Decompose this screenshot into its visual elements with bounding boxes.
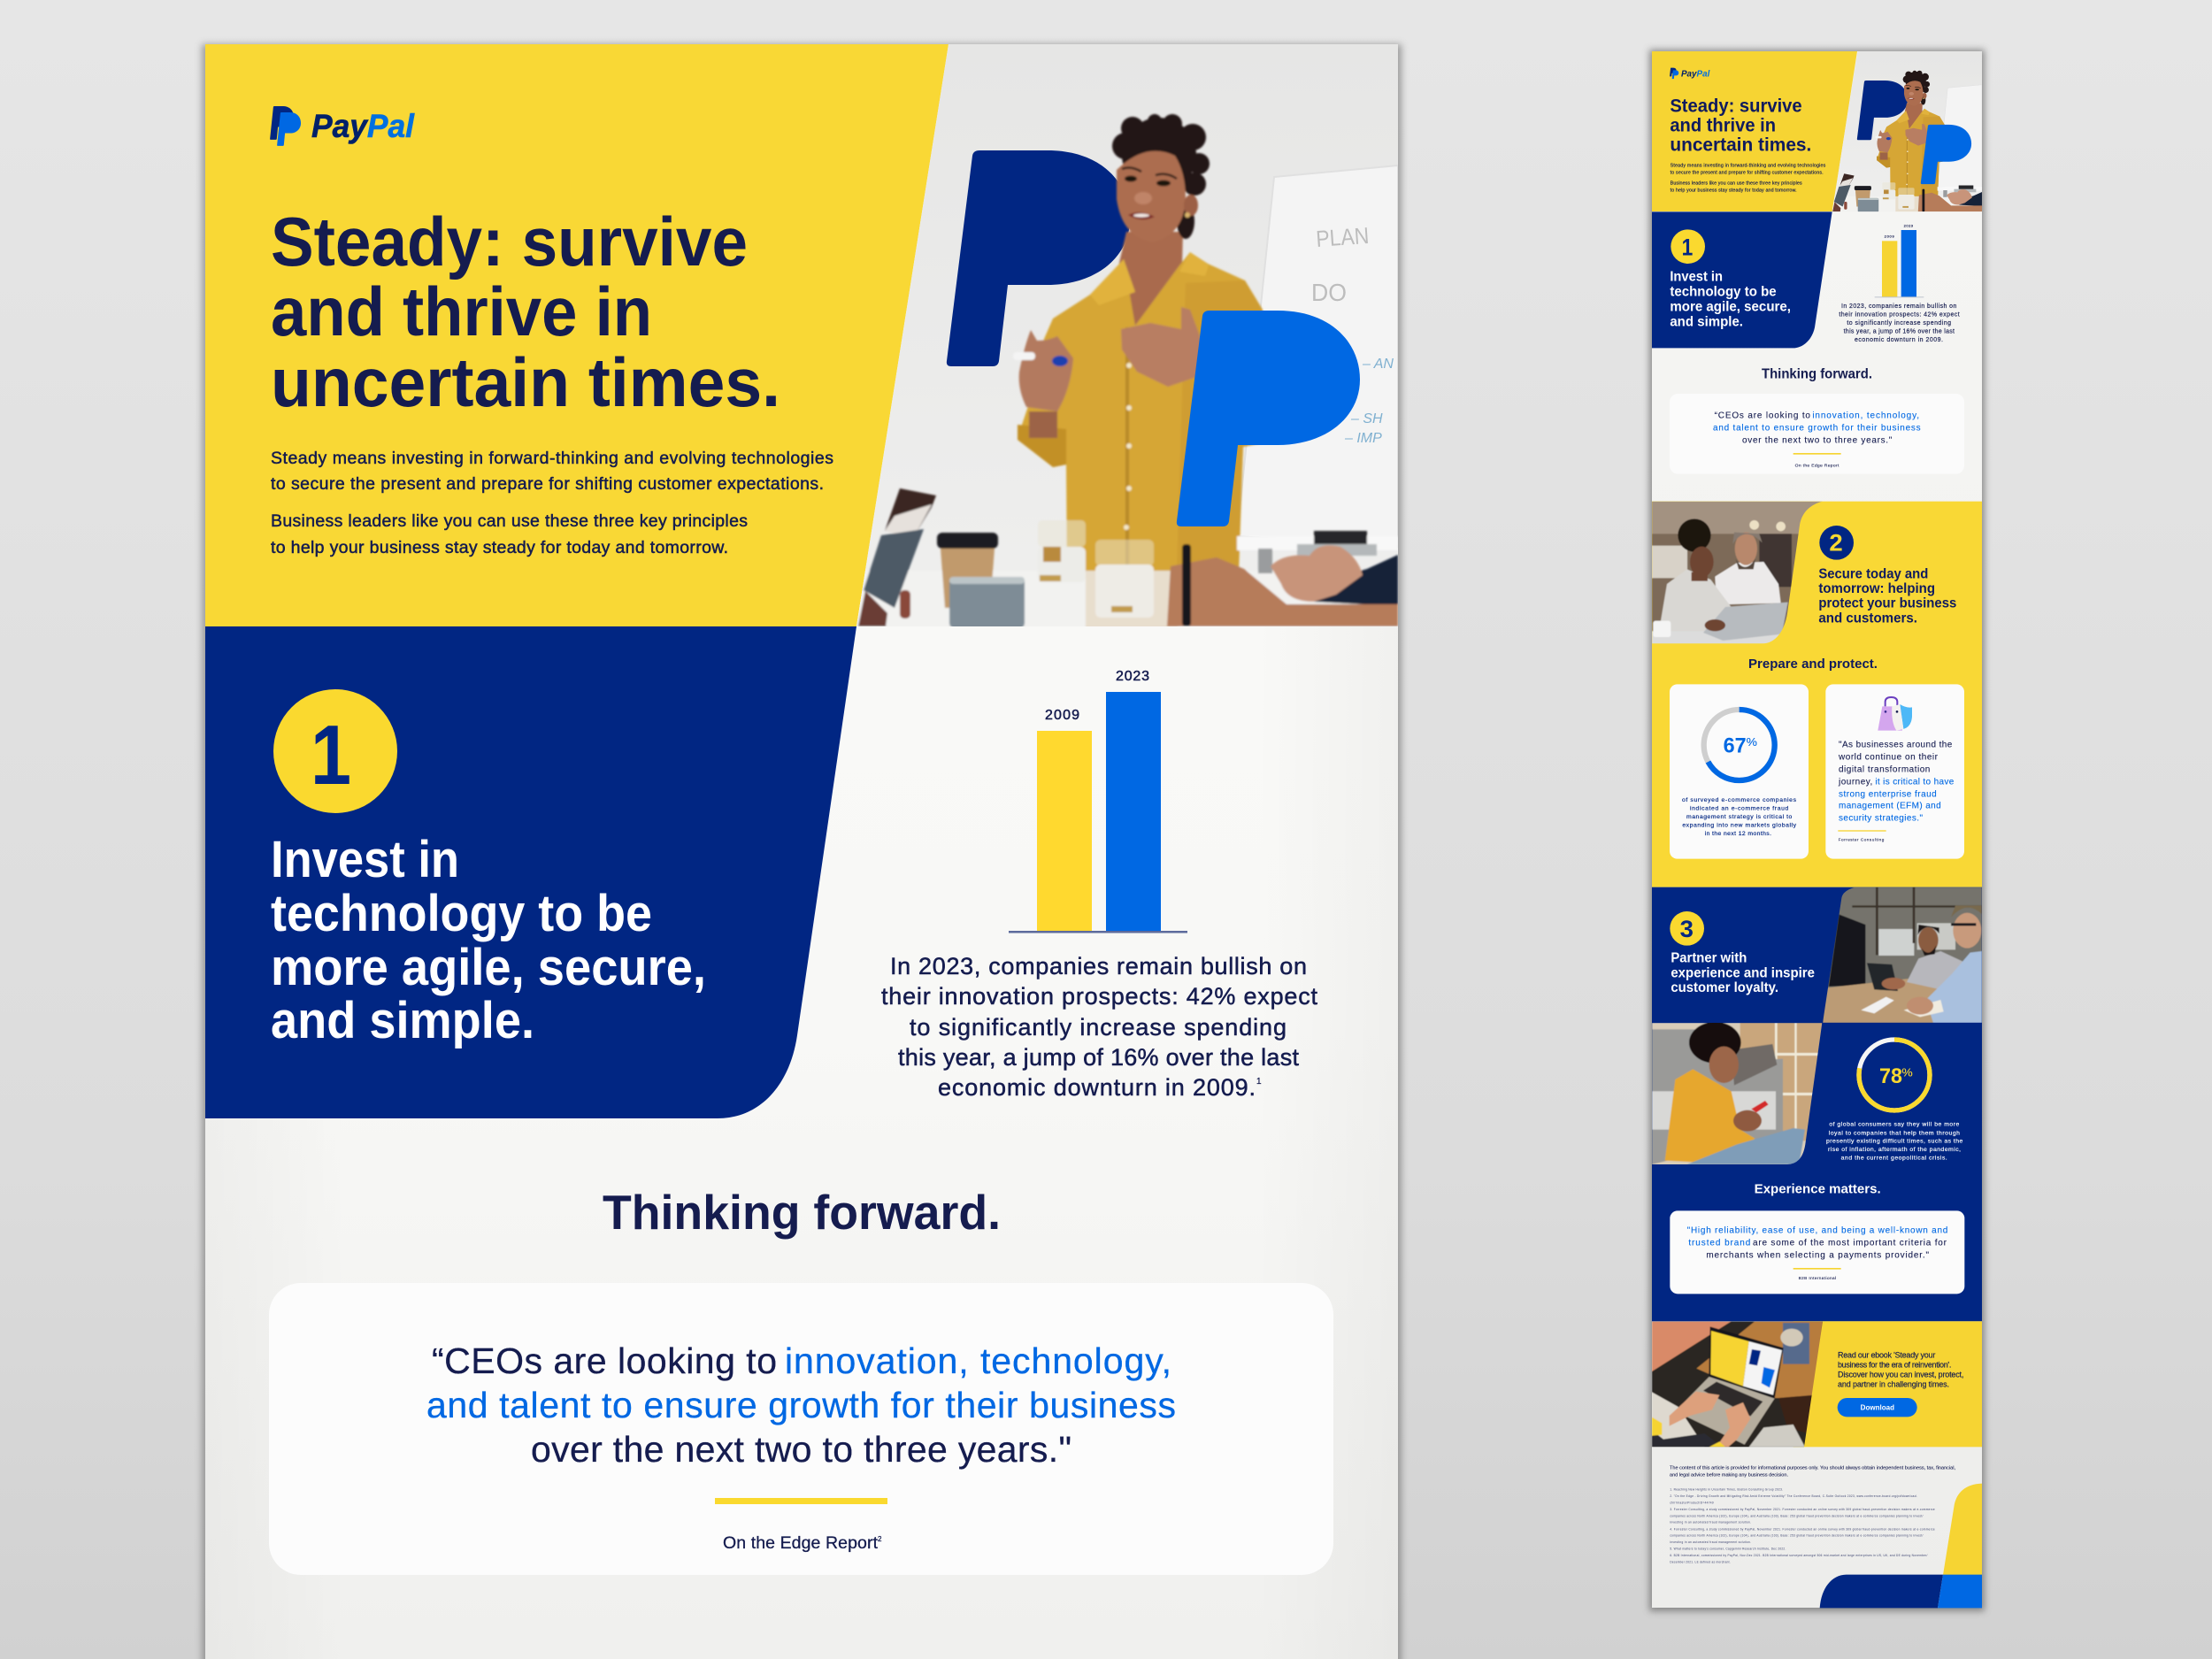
thumbnail hero copy: Business leaders like you can use these three key principles — [1671, 180, 1802, 186]
quote card with bag icon: security strategies." — [1839, 814, 1923, 824]
intro copy: Business leaders like you can use these three key principles — [271, 511, 748, 531]
thumbnail hero copy: and thrive in — [1670, 114, 1776, 136]
thumbnail quote card: over the next two to three years." — [1742, 435, 1893, 445]
hero yellow panel — [205, 44, 949, 626]
icon: shopping bag and shield — [1878, 697, 1912, 731]
footnotes: companies across North America (102), Europe (104), and Australia (103). Base: 253 global fraud prevention decision makers at e-commerce companies planning to invest/ — [1670, 1514, 1923, 1517]
whiteboard handwriting: – AN — [1362, 357, 1394, 372]
footnotes: 1. Reaching New Heights in Uncertain Times, Boston Consulting Group 2023. — [1670, 1487, 1783, 1491]
footnotes — [1670, 1487, 1935, 1563]
thumbnail section 1: technology to be — [1670, 284, 1777, 299]
whiteboard handwriting: PLAN — [1315, 222, 1370, 252]
stat copy 78%: and the current geopolitical crisis. — [1841, 1156, 1947, 1162]
PayPal logo — [270, 106, 415, 146]
stat card 67% — [1670, 684, 1809, 859]
experience quote card: merchants when selecting a payments provider." — [1706, 1250, 1929, 1260]
thumbnail section 3: Experience matters. — [1755, 1181, 1881, 1196]
quote card: over the next two to three years." — [531, 1429, 1071, 1470]
bar chart 2009 vs 2023: 2009 — [1045, 708, 1079, 723]
Thinking forward heading: Thinking forward. — [603, 1185, 1001, 1240]
thumbnail section 2: Prepare and protect. — [1748, 657, 1878, 672]
thumbnail hero — [1652, 51, 1982, 213]
stat copy 78%: rise of inflation, aftermath of the pandemic, — [1828, 1147, 1961, 1153]
disclaimer: and legal advice before making any business decision. — [1670, 1473, 1788, 1479]
stat card 67%: of surveyed e-commerce companies — [1682, 797, 1797, 803]
footnotes: 5. What matters to today's consumer, Capgemini Research Institute, Dec 2022. — [1670, 1548, 1786, 1551]
section 1 heading: more agile, secure, — [271, 939, 706, 996]
whiteboard handwriting: – IMP — [1344, 431, 1382, 446]
download button — [1838, 1398, 1917, 1417]
section 1 navy shape — [205, 626, 856, 1118]
thumbnail section 3: % — [1901, 1067, 1913, 1079]
full page thumbnail sheet — [1652, 51, 1982, 1608]
bar chart 2009 vs 2023 — [1009, 669, 1187, 933]
donut 78% — [1859, 1040, 1930, 1110]
thumbnail section 1: 1 — [1682, 234, 1693, 261]
chart description: economic downturn in 2009. — [938, 1074, 1256, 1101]
office photo — [1823, 887, 1982, 1023]
thumbnail section 1: economic downturn in 2009. — [1855, 337, 1943, 343]
section 3 heading — [1671, 950, 1815, 995]
section 2 heading: tomorrow: helping — [1818, 581, 1935, 596]
stat copy 78%: of global consumers say they will be more — [1829, 1122, 1960, 1128]
footnotes: companies across North America (102), Europe (104), and Australia (103). Base: 253 global fraud prevention decision makers at e-commerce companies planning to invest/ — [1670, 1534, 1923, 1538]
stat card 67%: in the next 12 months. — [1705, 831, 1771, 837]
footer blue shape — [1938, 1575, 1982, 1608]
quote card: “CEOs are looking to — [432, 1340, 777, 1381]
thumbnail quote card: and talent to ensure growth for their business — [1713, 423, 1921, 433]
thumbnail hero copy: to secure the present and prepare for shifting customer expectations. — [1671, 171, 1824, 176]
ebook call to action: and partner in challenging times. — [1838, 1379, 1949, 1388]
stat card 67%: expanding into new markets globally — [1682, 822, 1797, 828]
number badge 3: 3 — [1680, 916, 1694, 942]
chart description — [881, 953, 1317, 1101]
PayPal logo: PayPal — [311, 108, 415, 144]
intro copy: to help your business stay steady for today and tomorrow. — [271, 538, 728, 557]
thumbnail section 1: In 2023, companies remain bullish on — [1841, 303, 1956, 310]
ebook call to action: Discover how you can invest, protect, — [1838, 1370, 1963, 1379]
section 1 heading — [271, 831, 706, 1049]
number badge 2: 2 — [1829, 530, 1843, 557]
disclaimer: The content of this article is provided for informational purposes only. You should always obtain independent business, tax, financial, — [1670, 1465, 1955, 1471]
section 3 heading: experience and inspire — [1671, 965, 1815, 980]
thumbnail quote card: “CEOs are looking to — [1715, 411, 1810, 421]
quote card with bag icon: Forrester Consulting — [1839, 838, 1885, 842]
section 2 heading — [1818, 566, 1956, 626]
quote source: 2 — [878, 1535, 882, 1543]
laptop photo — [1652, 1321, 1826, 1448]
number badge 1 — [273, 689, 397, 813]
section 1 heading: technology to be — [271, 885, 652, 942]
number badge 1: 1 — [311, 708, 351, 803]
whiteboard handwriting: – SH — [1350, 411, 1383, 426]
ebook call to action: business for the era of reinvention'. — [1838, 1360, 1951, 1369]
couple photo — [1652, 502, 1829, 646]
footnotes: 6. B2B International, commissioned by PayPal, Nov-Dec 2021. B2B International surveyed amongst 506 mid-market and large enterprises in US, UK, and DE during November/ — [1670, 1554, 1927, 1557]
number badge 3 — [1670, 911, 1704, 946]
footnotes: 4. Forrester Consulting, a study commissioned by PayPal, November 2021. Forrester conducted an online survey with 309 global fraud-prevention decision makers at e-commerce — [1670, 1527, 1935, 1531]
stat card 67%: management strategy is critical to — [1686, 814, 1793, 820]
ebook call to action — [1838, 1350, 1963, 1388]
section 3 heading: Partner with — [1671, 950, 1747, 965]
large infographic sheet — [205, 44, 1398, 1659]
title: Steady: survive — [271, 203, 748, 280]
thumbnail download section — [1652, 1321, 1982, 1608]
thumbnail hero copy: PayPal — [1681, 70, 1710, 80]
thumbnail quote card: innovation, technology, — [1812, 411, 1919, 421]
thumbnail hero copy: to help your business stay steady for today and tomorrow. — [1671, 188, 1797, 193]
footnotes: cfm?masterProductID=44749 — [1670, 1502, 1714, 1505]
section 1 heading: and simple. — [271, 992, 534, 1049]
whiteboard handwriting — [1311, 222, 1394, 446]
section 3 heading: customer loyalty. — [1671, 980, 1778, 995]
thumbnail hero copy — [1670, 68, 1826, 193]
thumbnail section 1: more agile, secure, — [1670, 299, 1791, 314]
section 1 panel — [205, 626, 1317, 1118]
bar chart 2009 vs 2023: 2023 — [1116, 669, 1149, 684]
quote card with bag icon: strong enterprise fraud — [1839, 789, 1937, 799]
section 2 heading: Secure today and — [1818, 566, 1928, 581]
stat card 67%: 67 — [1724, 734, 1747, 758]
thumbnail section 3: 78 — [1879, 1064, 1902, 1088]
experience quote card — [1670, 1210, 1964, 1294]
thumbnail hero copy: Steady: survive — [1670, 95, 1802, 117]
stat copy 78%: presently existing difficult times, such as the — [1826, 1139, 1963, 1145]
quote card with bag icon: it is critical to have — [1875, 777, 1955, 787]
thumbnail section 1: their innovation prospects: 42% expect — [1839, 312, 1960, 319]
quote card — [269, 1283, 1333, 1575]
chart description: their innovation prospects: 42% expect — [881, 983, 1317, 1010]
quote card with bag icon: management (EFM) and — [1839, 802, 1941, 811]
quote card with bag icon: "As businesses around the — [1839, 740, 1953, 749]
section 2 heading: and customers. — [1818, 611, 1917, 626]
thumbnail section 1: to significantly increase spending — [1847, 320, 1951, 326]
chart description: 1 — [1256, 1077, 1262, 1087]
whiteboard handwriting: DO — [1311, 279, 1347, 306]
chart description: to significantly increase spending — [910, 1014, 1286, 1041]
quote source: On the Edge Report — [723, 1533, 879, 1553]
footnotes: 2. "On the Edge - Driving Growth and Mitigating Risk Amid Extreme Volatility" The Conference Board, C-Suite Outlook 2023, www.conference-board.org/pdfdownload. — [1670, 1494, 1917, 1498]
thumbnail section 1: 2009 — [1885, 234, 1894, 238]
thumbnail quote card: On the Edge Report — [1795, 464, 1839, 469]
experience quote card: are some of the most important criteria for — [1753, 1238, 1947, 1248]
intro copy: to secure the present and prepare for shifting customer expectations. — [271, 474, 824, 494]
ebook call to action: Read our ebook 'Steady your — [1838, 1350, 1935, 1359]
download button: Download — [1861, 1403, 1894, 1411]
chart description: this year, a jump of 16% over the last — [898, 1044, 1299, 1071]
footer yellow shape — [1943, 1484, 1982, 1575]
thumbnail hero copy: Steady means investing in forward-thinking and evolving technologies — [1671, 164, 1826, 169]
number badge 2 — [1819, 526, 1854, 560]
thumbnail section 1: 2023 — [1904, 224, 1914, 228]
thumbnail section 1: this year, a jump of 16% over the last — [1844, 328, 1955, 334]
experience quote card: "High reliability, ease of use, and being a well-known and — [1687, 1225, 1947, 1235]
hero panel — [205, 44, 1398, 633]
intro copy: Steady means investing in forward-thinking and evolving technologies — [271, 449, 833, 468]
stat copy 78% — [1826, 1122, 1963, 1162]
chart description: In 2023, companies remain bullish on — [890, 953, 1307, 979]
stat card 67%: % — [1747, 736, 1757, 749]
thumbnail section 3 — [1652, 887, 1982, 1321]
experience quote card: B2B International — [1799, 1276, 1836, 1280]
thumbnail quote card — [1670, 394, 1964, 474]
quote card with bag icon: digital transformation — [1839, 764, 1930, 774]
thumbnail section 1 — [1652, 211, 1964, 474]
footer navy shape — [1820, 1575, 1943, 1608]
thumbnail section 1: and simple. — [1670, 314, 1743, 329]
quote card with bag icon: journey, — [1838, 777, 1872, 787]
hero photo with PayPal marks — [849, 44, 1398, 633]
footnotes: investing in an automated fraud management solution. — [1670, 1540, 1751, 1544]
footnotes: 3. Forrester Consulting, a study commissioned by PayPal, November 2021. Forrester conducted an online survey with 309 global fraud-prevention decision makers at e-commerce — [1670, 1508, 1935, 1511]
intro copy — [271, 449, 833, 557]
thumbnail section 2 — [1652, 502, 1982, 887]
title: and thrive in — [271, 273, 652, 350]
section 2 heading: protect your business — [1818, 596, 1956, 611]
thumbnail section 1: Thinking forward. — [1762, 367, 1872, 382]
title: uncertain times. — [271, 343, 780, 421]
quote card: innovation, technology, — [785, 1340, 1171, 1381]
title — [271, 203, 780, 421]
experience quote card: trusted brand — [1688, 1238, 1750, 1248]
quote card with bag icon: world continue on their — [1838, 752, 1939, 762]
section 1 heading: Invest in — [271, 831, 459, 888]
stat copy 78%: loyal to companies that help them through — [1829, 1130, 1960, 1136]
quote card with bag icon — [1825, 684, 1964, 859]
thumbnail section 1: Invest in — [1670, 270, 1723, 285]
quote card: and talent to ensure growth for their business — [426, 1385, 1176, 1425]
yellow divider — [715, 1498, 887, 1504]
donut 67% — [1704, 710, 1775, 780]
woman with phone photo — [1652, 1022, 1829, 1167]
thumbnail hero copy: uncertain times. — [1670, 134, 1811, 156]
disclaimer — [1670, 1465, 1955, 1479]
stat card 67%: indicated an e-commerce fraud — [1690, 806, 1789, 812]
footnotes: December 2021. LE defined as merchant. — [1670, 1560, 1731, 1563]
footnotes: investing in an automated fraud management solution. — [1670, 1521, 1751, 1525]
